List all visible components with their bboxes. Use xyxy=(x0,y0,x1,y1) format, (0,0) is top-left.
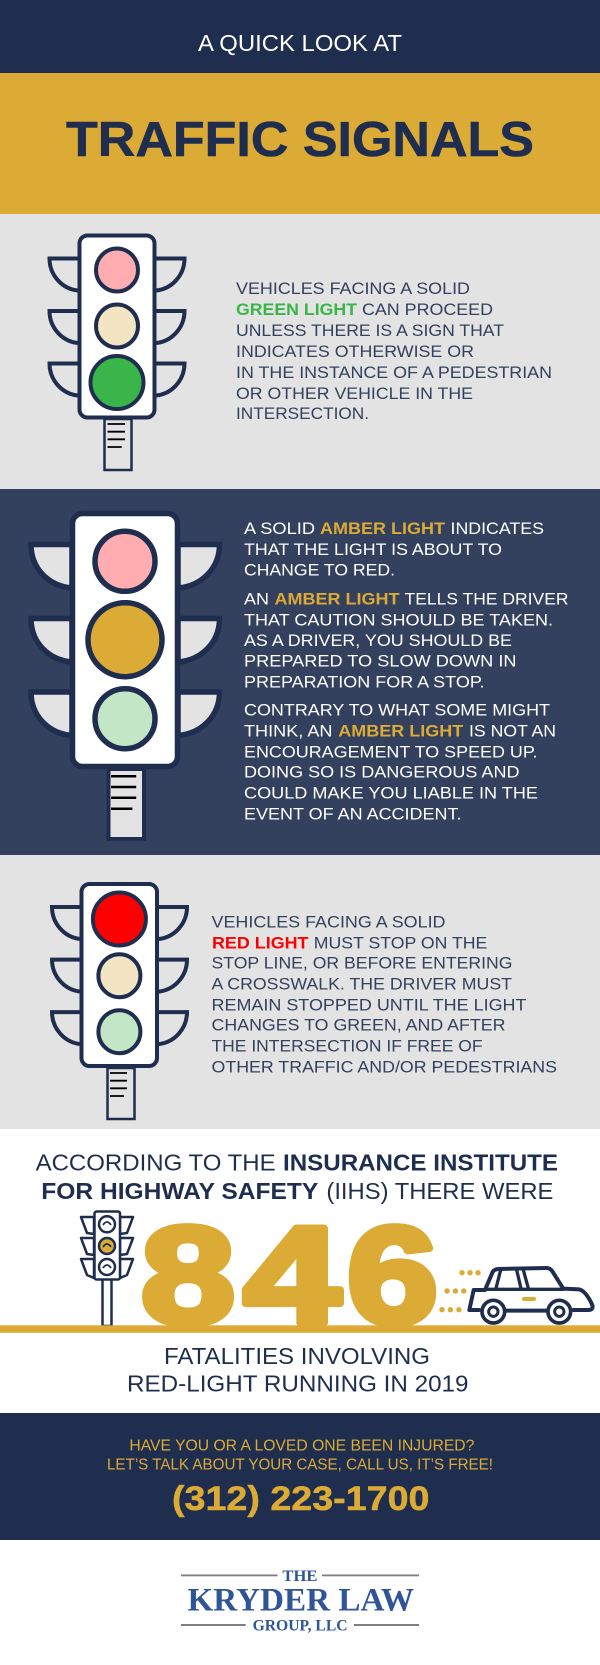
fatalities caption: RED-LIGHT RUNNING IN 2019 xyxy=(127,1371,468,1397)
header band xyxy=(0,0,600,73)
big number 846: 4 xyxy=(244,1199,341,1353)
green light text: GREEN LIGHT xyxy=(236,300,358,319)
red light text: RED LIGHT xyxy=(212,934,309,952)
amber light text: AMBER LIGHT xyxy=(338,722,464,740)
fatalities caption xyxy=(127,1343,468,1397)
logo: THE xyxy=(282,1568,317,1585)
amber light text: COULD MAKE YOU LIABLE IN THE xyxy=(244,784,538,802)
green light text: CAN PROCEED xyxy=(362,300,493,319)
amber light text: THAT THE LIGHT IS ABOUT TO xyxy=(244,540,502,559)
panel: call to action xyxy=(0,1413,600,1540)
amber light text: DOING SO IS DANGEROUS AND xyxy=(244,762,520,782)
green light text: INTERSECTION. xyxy=(236,404,369,423)
amber light text: A SOLID xyxy=(244,519,315,538)
green light text: OR OTHER VEHICLE IN THE xyxy=(236,384,473,403)
amber light text: AMBER LIGHT xyxy=(274,590,400,608)
call to action text: LET’S TALK ABOUT YOUR CASE, CALL US, IT’S FREE! xyxy=(107,1456,493,1473)
red light text: REMAIN STOPPED UNTIL THE LIGHT xyxy=(212,996,526,1014)
panel: red light xyxy=(0,855,600,1129)
big number 846: 8 xyxy=(141,1199,235,1353)
amber light text: ENCOURAGEMENT TO SPEED UP. xyxy=(244,742,538,762)
fatalities caption: FATALITIES INVOLVING xyxy=(164,1343,430,1369)
red light text xyxy=(212,912,557,1076)
statistic intro: ACCORDING TO THE xyxy=(36,1150,276,1176)
phone number: (312) 223-1700 xyxy=(172,1480,430,1518)
red light text: CHANGES TO GREEN, AND AFTER xyxy=(212,1016,506,1034)
title: TRAFFIC SIGNALS xyxy=(66,113,534,167)
call to action text xyxy=(107,1437,493,1473)
logo xyxy=(181,1568,419,1635)
icon: speed dots xyxy=(439,1270,481,1312)
icon: car xyxy=(469,1268,593,1323)
green light text: VEHICLES FACING A SOLID xyxy=(236,279,470,298)
panel: green light xyxy=(0,214,600,489)
amber light text: CHANGE TO RED. xyxy=(244,560,395,580)
amber light text: PREPARATION FOR A STOP. xyxy=(244,672,484,692)
big number 846 xyxy=(141,1199,438,1353)
amber light text: INDICATES xyxy=(450,519,544,538)
red light text: A CROSSWALK. THE DRIVER MUST xyxy=(212,974,512,994)
amber light text xyxy=(244,519,568,824)
red light text: OTHER TRAFFIC AND/OR PEDESTRIANS xyxy=(212,1058,557,1076)
amber light text: EVENT OF AN ACCIDENT. xyxy=(244,804,462,824)
amber light text: THINK, AN xyxy=(244,722,332,740)
big number 846: 6 xyxy=(347,1199,438,1353)
panel: statistic xyxy=(0,1129,600,1413)
icon: small traffic light xyxy=(81,1212,133,1326)
green light text xyxy=(236,279,552,423)
red light text: MUST STOP ON THE xyxy=(314,934,487,952)
amber light text: IS NOT AN xyxy=(469,722,556,740)
green light text: INDICATES OTHERWISE OR xyxy=(236,342,474,361)
amber light text: TELLS THE DRIVER xyxy=(404,590,568,608)
amber light text: AMBER LIGHT xyxy=(320,519,446,538)
statistic intro: INSURANCE INSTITUTE xyxy=(283,1150,558,1176)
icon: traffic light red xyxy=(52,884,187,1119)
amber light text: AN xyxy=(244,590,269,608)
logo: KRYDER LAW xyxy=(188,1583,414,1619)
statistic intro: FOR HIGHWAY SAFETY xyxy=(41,1178,318,1204)
icon: traffic light green xyxy=(50,236,184,470)
green light text: UNLESS THERE IS A SIGN THAT xyxy=(236,321,504,340)
red light text: STOP LINE, OR BEFORE ENTERING xyxy=(212,954,512,972)
title band xyxy=(0,73,600,214)
kicker: A QUICK LOOK AT xyxy=(198,30,402,56)
icon: traffic light amber xyxy=(31,514,220,839)
amber light text: AS A DRIVER, YOU SHOULD BE xyxy=(244,631,512,650)
statistic intro: (IIHS) THERE WERE xyxy=(326,1178,553,1204)
amber light text: THAT CAUTION SHOULD BE TAKEN. xyxy=(244,610,553,630)
statistic intro xyxy=(36,1150,558,1204)
red light text: VEHICLES FACING A SOLID xyxy=(212,912,446,932)
amber light text: PREPARED TO SLOW DOWN IN xyxy=(244,652,516,670)
green light text: IN THE INSTANCE OF A PEDESTRIAN xyxy=(236,363,552,382)
call to action text: HAVE YOU OR A LOVED ONE BEEN INJURED? xyxy=(129,1437,474,1454)
logo: GROUP, LLC xyxy=(253,1618,348,1635)
road line xyxy=(0,1325,600,1333)
amber light text: CONTRARY TO WHAT SOME MIGHT xyxy=(244,700,550,720)
panel: amber light xyxy=(0,489,600,855)
red light text: THE INTERSECTION IF FREE OF xyxy=(212,1036,482,1056)
